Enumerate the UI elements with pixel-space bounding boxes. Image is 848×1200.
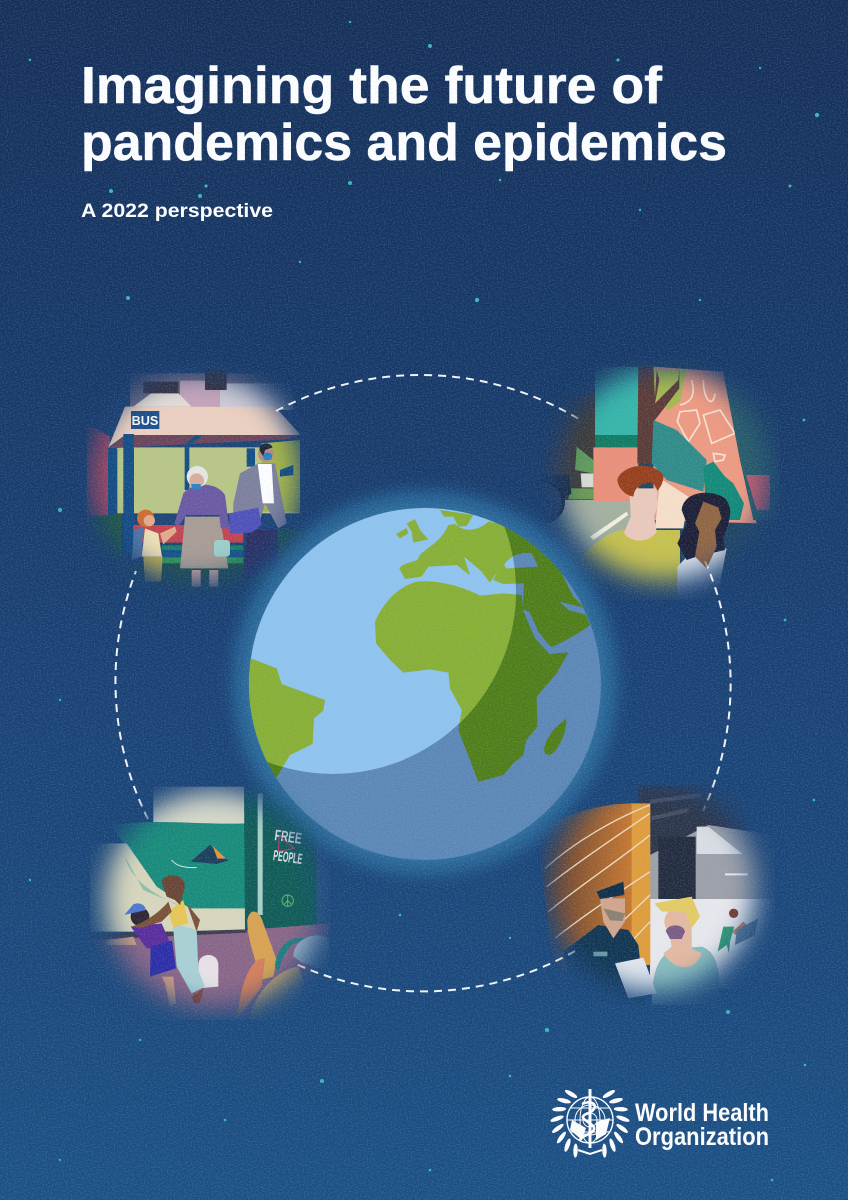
roof (108, 407, 301, 447)
arch window (198, 955, 218, 988)
scooter (550, 475, 572, 498)
graffiti: FREE (273, 827, 303, 848)
scene: couple in street (545, 366, 777, 600)
WHO emblem (550, 1088, 630, 1158)
scene: beach view from vehicle (90, 780, 330, 1020)
dark pillar (658, 837, 696, 902)
door (244, 787, 317, 928)
traveller (652, 897, 719, 1005)
subtitle: A 2022 perspective (81, 201, 273, 222)
salmon building (653, 367, 757, 523)
officer (563, 882, 657, 1005)
scene: airport officer and traveller (535, 775, 775, 1005)
back panels (116, 447, 300, 513)
seats (237, 912, 330, 1020)
floor (650, 899, 775, 988)
bench (133, 525, 243, 543)
title: Imagining the future of (81, 57, 663, 115)
bus sign: BUS (132, 414, 158, 428)
teal foliage (652, 420, 707, 492)
red side wall (87, 423, 110, 517)
sea (110, 822, 245, 910)
WHO wordmark: World Health (635, 1099, 769, 1127)
orange column (538, 803, 650, 972)
ground (124, 563, 266, 590)
pavement (655, 478, 688, 528)
globe (227, 483, 623, 880)
WHO wordmark: Organization (635, 1123, 769, 1151)
beach (90, 843, 245, 932)
WHO logo (550, 1088, 769, 1158)
pink wall (593, 447, 638, 502)
dashed orbit ring (115, 375, 731, 991)
dark building (554, 394, 595, 500)
scene: bus stop (86, 370, 302, 590)
tree (637, 367, 679, 463)
bush (703, 462, 744, 520)
graffiti: PEOPLE (272, 848, 303, 868)
wall (90, 923, 330, 1020)
rock island (172, 845, 228, 868)
child (132, 510, 177, 582)
road (550, 500, 631, 566)
back wall (650, 825, 775, 902)
woman (132, 875, 205, 1003)
title: pandemics and epidemics (81, 114, 727, 172)
globe night side (245, 508, 601, 860)
WHO wordmark (635, 1099, 769, 1151)
distant figure (718, 909, 758, 953)
window (595, 367, 638, 435)
man with bag (229, 443, 287, 580)
fern (575, 447, 593, 473)
title (81, 57, 727, 172)
grandmother (174, 466, 230, 587)
right side (724, 374, 774, 520)
man (582, 466, 680, 600)
sky (153, 787, 245, 825)
globe day side (249, 508, 516, 774)
shelter posts (108, 434, 255, 553)
lime leaves (652, 370, 687, 410)
child (107, 903, 176, 1007)
woman (677, 493, 730, 600)
ceiling (638, 785, 748, 872)
globe halo (215, 474, 635, 894)
roof underside (108, 435, 300, 448)
graffiti (272, 827, 303, 906)
city skyline (130, 373, 272, 407)
